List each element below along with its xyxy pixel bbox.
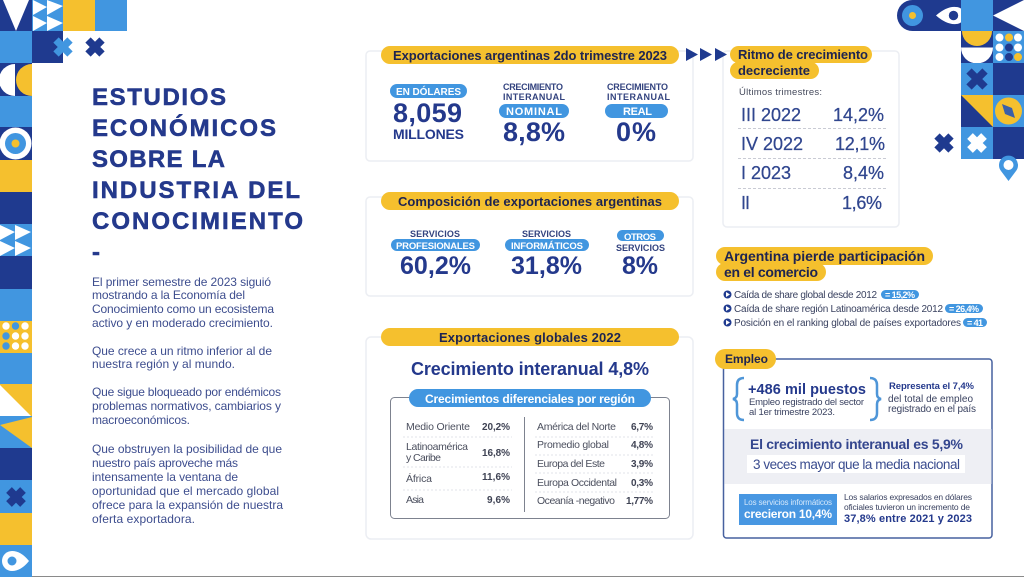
panel: composición de exportaciones: 8%	[622, 252, 658, 280]
panel: exportaciones globales: 3,9%	[631, 459, 653, 470]
panel: empleo: crecieron 10,4%	[744, 507, 832, 521]
panel: ritmo de crecimiento: IV 2022	[741, 134, 803, 154]
panel: exportaciones globales: Crecimientos diferenciales por región	[425, 392, 635, 406]
panel: empleo: 37,8% entre 2021 y 2023	[844, 513, 972, 525]
intro text: oferta exportadora.	[92, 512, 195, 526]
panel: exportaciones globales: Exportaciones globales 2022	[439, 330, 621, 345]
panel: empleo: al 1er trimestre 2023.	[749, 407, 835, 418]
panel: exportaciones argentinas: INTERANUAL	[503, 92, 566, 102]
panel: ritmo de crecimiento: Últimos trimestres:	[739, 87, 822, 98]
title: ECONÓMICOS	[92, 114, 276, 142]
panel: exportaciones globales: Medio Oriente	[406, 421, 470, 433]
panel: exportaciones globales	[366, 328, 693, 539]
panel: empleo	[715, 349, 992, 538]
panel: exportaciones argentinas: CRECIMIENTO	[607, 82, 668, 92]
panel: exportaciones globales: 0,3%	[631, 478, 653, 489]
panel: composición de exportaciones: 60,2%	[400, 252, 471, 280]
panel: empleo: oficiales tuvieron un incremento de	[844, 502, 970, 512]
panel: ritmo de crecimiento: 1,6%	[842, 193, 882, 213]
panel: empleo: del total de empleo	[888, 394, 973, 405]
panel: exportaciones globales: Promedio global	[537, 439, 609, 451]
panel: exportaciones globales: Oceanía -negativo	[537, 495, 615, 507]
intro text: nuestro país aproveche más	[92, 456, 238, 470]
intro text	[92, 275, 283, 526]
intro text: intensamente la ventana de	[92, 470, 238, 484]
panel: exportaciones argentinas: EN DÓLARES	[396, 85, 461, 98]
panel: exportaciones globales: 20,2%	[482, 422, 510, 433]
panel: empleo: +486 mil puestos	[748, 382, 866, 398]
panel: exportaciones globales: Asia	[406, 494, 424, 506]
intro text: activo y en moderado crecimiento.	[92, 316, 273, 330]
panel: argentina pierde participación: Caída de share global desde 2012	[734, 290, 877, 301]
panel: ritmo de crecimiento: III 2022	[741, 105, 801, 125]
intro text: ofrece para la expansión de nuestra	[92, 498, 283, 512]
panel: empleo: Representa el 7,4%	[889, 381, 975, 392]
panel: composición de exportaciones: PROFESIONALES	[396, 241, 475, 252]
panel: ritmo de crecimiento: Ritmo de crecimiento	[738, 47, 868, 62]
panel: exportaciones globales: 16,8%	[482, 448, 510, 459]
intro text: oportunidad que el mercado global	[92, 484, 279, 498]
panel: ritmo de crecimiento: II	[741, 193, 750, 213]
arrows	[686, 48, 727, 61]
title	[92, 84, 303, 266]
panel: ritmo de crecimiento	[723, 46, 899, 227]
panel: exportaciones argentinas: 8,8%	[503, 117, 565, 147]
intro text: macroeconómicos.	[92, 413, 190, 427]
panel: exportaciones argentinas: Exportaciones argentinas 2do trimestre 2023	[393, 48, 667, 63]
panel: exportaciones globales: África	[406, 472, 432, 485]
panel: argentina pierde participación: Argentina pierde participación	[724, 248, 925, 264]
panel: exportaciones globales: 4,8%	[631, 440, 653, 451]
panel: exportaciones argentinas: REAL	[623, 106, 652, 118]
panel: empleo: registrado en el país	[888, 404, 976, 415]
intro text: El primer semestre de 2023 siguió	[92, 275, 271, 289]
panel: argentina pierde participación: Posición en el ranking global de países exportadores	[734, 318, 961, 329]
panel: composición de exportaciones: SERVICIOS	[616, 243, 665, 253]
panel: composición de exportaciones	[366, 192, 693, 296]
panel: exportaciones globales: Europa del Este	[537, 458, 605, 470]
panel: argentina pierde participación: Caída de share región Latinoamérica desde 2012	[734, 304, 943, 315]
intro text: nuestra región y al mundo.	[92, 357, 235, 371]
panel: argentina pierde participación: = 15,2%	[885, 290, 915, 300]
panel: empleo: El crecimiento interanual es 5,9%	[750, 436, 964, 452]
panel: empleo: Empleo	[725, 352, 768, 366]
panel: exportaciones globales: Crecimiento interanual 4,8%	[411, 359, 649, 379]
title: SOBRE LA	[92, 146, 225, 173]
title: INDUSTRIA DEL	[92, 177, 300, 204]
intro text: Que crece a un ritmo inferior al de	[92, 344, 272, 358]
panel: exportaciones argentinas	[366, 46, 693, 161]
intro text: mostrando a la Economía del	[92, 288, 245, 302]
intro text: Que obstruyen la posibilidad de que	[92, 442, 282, 456]
panel: ritmo de crecimiento: decreciente	[738, 63, 810, 78]
panel: ritmo de crecimiento: 12,1%	[835, 134, 885, 154]
panel: exportaciones argentinas: MILLONES	[393, 126, 464, 142]
panel: composición de exportaciones: SERVICIOS	[522, 229, 571, 239]
intro text: problemas normativos, cambiarios y	[92, 399, 281, 413]
intro text: Que sigue bloqueado por endémicos	[92, 385, 281, 399]
panel: composición de exportaciones: Composición de exportaciones argentinas	[398, 194, 662, 209]
panel: exportaciones globales: 9,6%	[487, 495, 510, 506]
right decorative mosaic	[897, 0, 1024, 181]
title: ESTUDIOS	[92, 84, 226, 111]
panel: argentina pierde participación: en el comercio	[724, 264, 818, 280]
panel: exportaciones argentinas: NOMINAL	[506, 106, 562, 118]
title: -	[92, 239, 100, 266]
panel: ritmo de crecimiento: I 2023	[741, 163, 791, 183]
panel: composición de exportaciones: INFORMÁTICOS	[511, 241, 583, 252]
panel: exportaciones globales: y Caribe	[406, 452, 441, 464]
panel: exportaciones globales: América del Norte	[537, 421, 616, 433]
panel: empleo: Los salarios expresados en dólares	[844, 492, 972, 502]
panel: argentina pierde participación: = 26,4%	[949, 304, 979, 314]
panel: composición de exportaciones: OTROS	[624, 232, 656, 243]
panel: exportaciones argentinas: CRECIMIENTO	[503, 82, 563, 92]
panel: exportaciones argentinas: 0%	[616, 117, 656, 147]
panel: exportaciones globales: 6,7%	[631, 422, 653, 433]
panel: exportaciones globales: 11,6%	[482, 472, 510, 483]
intro text: Conocimiento como un ecosistema	[92, 302, 274, 316]
panel: empleo: 3 veces mayor que la media nacional	[753, 457, 960, 472]
left decorative mosaic	[0, 0, 127, 577]
panel: composición de exportaciones: SERVICIOS	[410, 229, 460, 239]
panel: exportaciones argentinas: INTERANUAL	[607, 92, 670, 102]
panel: exportaciones globales: 1,77%	[626, 496, 653, 507]
panel: empleo: Empleo registrado del sector	[749, 397, 864, 408]
panel: exportaciones globales: Europa Occidental	[537, 477, 617, 489]
title: CONOCIMIENTO	[92, 208, 303, 235]
panel: exportaciones globales: Latinoamérica	[406, 441, 468, 453]
panel: ritmo de crecimiento: 14,2%	[833, 105, 884, 125]
panel: ritmo de crecimiento: 8,4%	[843, 163, 884, 183]
panel: exportaciones argentinas: 8,059	[393, 98, 462, 128]
panel: composición de exportaciones: 31,8%	[511, 252, 582, 280]
panel: argentina pierde participación	[716, 247, 987, 329]
panel: empleo: Los servicios informáticos	[744, 498, 832, 507]
panel: argentina pierde participación: = 41	[967, 318, 983, 328]
